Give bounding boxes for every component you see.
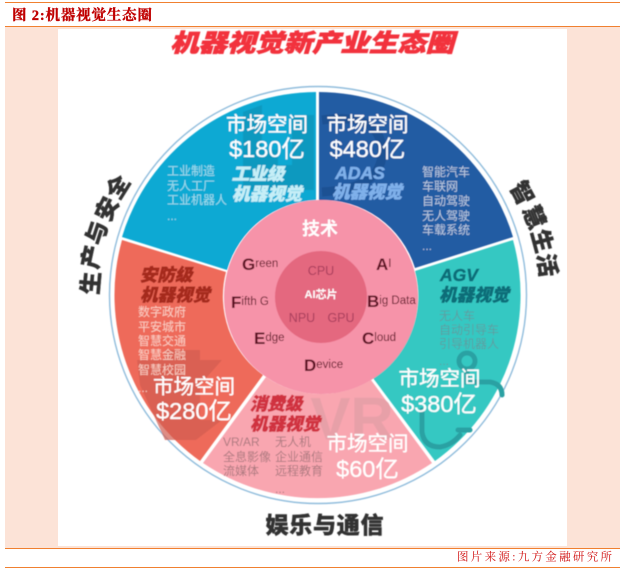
panel: industrial wedge: 机器视觉 [232, 184, 304, 204]
label: smart life [505, 177, 561, 278]
panel: AGV wedge: AGV [439, 265, 479, 285]
list: AGV uses: 引导机器人 [439, 337, 499, 351]
list: AGV uses: 无人车 [439, 308, 475, 323]
source note: 图片来源:九方金融研究所 [457, 550, 612, 564]
panel: industrial wedge: $180亿 [229, 136, 305, 162]
list: consumer uses: ... [275, 482, 285, 496]
list: ADAS uses: 智能汽车 [422, 164, 470, 179]
list: consumer uses: 无人机 [275, 435, 311, 449]
panel: ADAS wedge [319, 92, 513, 268]
panel: security wedge: 市场空间 [153, 376, 235, 398]
list: security uses: 智慧交通 [138, 333, 186, 348]
list: AGV uses [439, 308, 499, 368]
list: AGV uses: ... [439, 354, 449, 368]
list: consumer uses: 企业通信 [275, 449, 323, 464]
panel: AI chip core [275, 251, 367, 343]
list: ADAS uses: 自动驾驶 [422, 193, 470, 208]
label: production and safety: 全 [101, 170, 135, 204]
label: production and safety: 安 [90, 193, 124, 225]
list: ADAS uses: 无人驾驶 [422, 208, 470, 223]
panel: AGV wedge [373, 240, 521, 461]
panel: ADAS wedge: 机器视觉 [332, 182, 404, 202]
list: AGV uses: 自动引导车 [439, 322, 499, 337]
list: security uses [138, 304, 186, 395]
label: smart life: 生 [526, 227, 558, 255]
label: production and safety: 生 [77, 270, 105, 296]
label: production and safety: 产 [77, 243, 107, 271]
panel: security wedge: 机器视觉 [140, 285, 212, 305]
label: Cloud: Cloud [362, 328, 396, 348]
panel: ADAS wedge: ADAS [334, 163, 385, 183]
list: security uses: 数字政府 [138, 304, 186, 319]
panel: AGV wedge: $380亿 [401, 391, 477, 417]
list: ADAS uses: ... [422, 239, 432, 253]
label: smart life: 慧 [518, 201, 550, 233]
list: industrial uses: ... [167, 209, 177, 223]
list: industrial uses [167, 164, 227, 223]
label: entertainment and communication: 娱乐与通信 [266, 512, 384, 538]
panel: AGV wedge: 市场空间 [398, 368, 480, 390]
label: Fifth G: Fifth G [231, 292, 269, 312]
label: Green: Green [242, 254, 278, 274]
label: production and safety: 与 [81, 218, 113, 248]
label: smart life: 智 [505, 177, 539, 209]
panel: consumer wedge: 机器视觉 [250, 414, 322, 434]
heading: figure caption: 图 2:机器视觉生态圈 [12, 6, 152, 24]
panel: AI chip core: CPU [308, 264, 334, 278]
icon: steering wheel [322, 119, 382, 192]
panel: industrial wedge [122, 92, 316, 270]
panel: consumer wedge [203, 377, 432, 498]
outer ring [110, 86, 526, 504]
list: industrial uses: 工业制造 [167, 164, 215, 178]
list: consumer uses: 流媒体 [223, 464, 259, 478]
panel: ADAS wedge: 市场空间 [326, 114, 408, 136]
diagram: ecosystem wheel [77, 30, 561, 538]
title: 机器视觉新产业生态圈 [170, 30, 459, 58]
list: industrial uses: 无人工厂 [167, 179, 215, 193]
panel: ADAS wedge: $480亿 [330, 136, 405, 162]
label: Device: Device [304, 356, 343, 374]
list: consumer uses [223, 435, 323, 496]
list: consumer uses: 远程教育 [275, 463, 323, 478]
icon: factory [243, 105, 314, 190]
list: ADAS uses [422, 164, 470, 253]
list: security uses: ... [138, 381, 148, 395]
list: consumer uses: 全息影像 [223, 449, 271, 464]
panel: security wedge: $280亿 [156, 398, 232, 424]
icon: robot arm [422, 353, 502, 447]
panel: security wedge: 安防级 [140, 265, 195, 285]
list: security uses: 智慧金融 [138, 347, 186, 362]
panel: AI chip core: GPU [327, 311, 355, 325]
panel: consumer wedge: $60亿 [336, 456, 399, 482]
label: Edge: Edge [254, 328, 285, 348]
label: production and safety [77, 170, 135, 296]
panel: industrial wedge: 工业级 [232, 164, 287, 184]
list: consumer uses: VR/AR [223, 435, 260, 449]
panel: AI chip core: NPU [289, 311, 315, 325]
label: AI: AI [376, 254, 391, 274]
panel: AGV wedge: 机器视觉 [439, 285, 511, 305]
icon: traffic light [137, 350, 222, 440]
panel: security wedge [114, 240, 263, 461]
icon: VR mark: VR [310, 386, 394, 452]
label: Big Data: Big Data [367, 292, 416, 310]
list: ADAS uses: 车联网 [422, 178, 458, 194]
panel: AI chip core: AI芯片 [304, 287, 338, 301]
panel: consumer wedge: 消费级 [250, 394, 305, 414]
heading: technology: 技术 [302, 219, 338, 239]
list: industrial uses: 工业机器人 [167, 193, 227, 207]
panel: technology ring [224, 200, 418, 394]
panel: industrial wedge: 市场空间 [226, 114, 308, 136]
list: ADAS uses: 车载系统 [422, 222, 470, 237]
panel: image background [58, 29, 567, 546]
label: smart life: 活 [533, 252, 561, 278]
panel: consumer wedge: 市场空间 [326, 432, 408, 456]
list: security uses: 智慧校园 [138, 362, 186, 377]
list: security uses: 平安城市 [138, 319, 186, 334]
